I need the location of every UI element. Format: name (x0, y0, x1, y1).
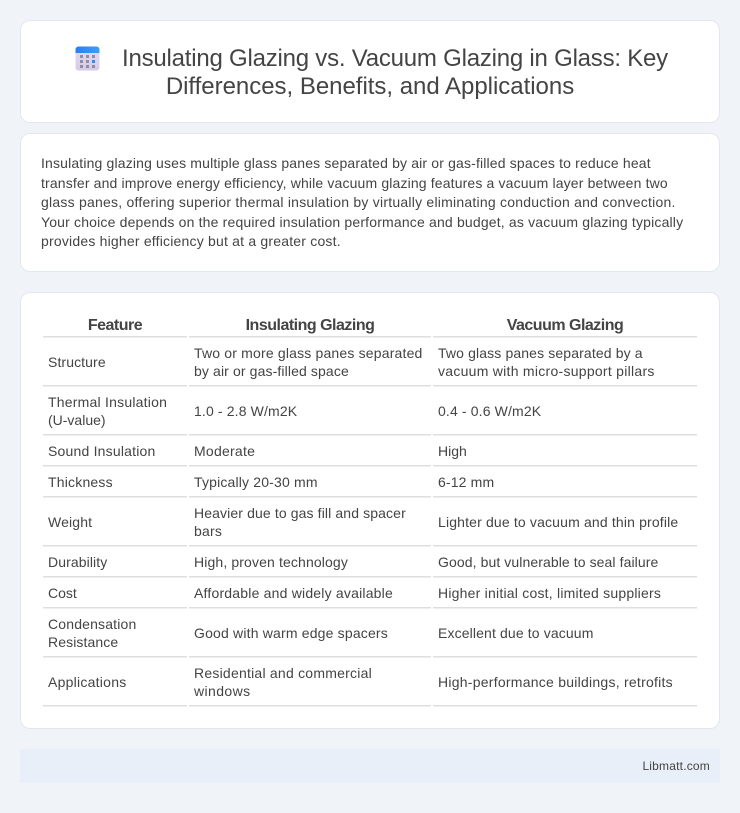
row: structure (48, 345, 655, 379)
table header: Vacuum Glazing (507, 317, 623, 334)
row: applications (48, 665, 673, 699)
title: Differences, Benefits, and Applications (166, 73, 574, 100)
row: thermal insulation: (U-value) (48, 412, 106, 428)
panel: comparison table (20, 292, 720, 729)
row: durability: High, proven technology (194, 554, 348, 570)
row: weight: Lighter due to vacuum and thin profile (438, 514, 678, 530)
row: applications: windows (194, 683, 250, 699)
row: thickness (48, 474, 494, 490)
row: structure: Two glass panes separated by a (438, 345, 643, 361)
row: condensation resistance (48, 616, 594, 650)
row: thermal insulation (48, 394, 541, 428)
row: condensation resistance: Condensation (48, 616, 136, 632)
row: sound insulation: Moderate (194, 443, 255, 459)
row: thermal insulation: 1.0 - 2.8 W/m2K (194, 403, 297, 419)
row: cost: Higher initial cost, limited suppliers (438, 585, 661, 601)
text block: introduction (41, 155, 684, 249)
row: condensation resistance: Excellent due to vacuum (438, 625, 594, 641)
row: weight: Weight (48, 514, 92, 530)
row: durability: Durability (48, 554, 107, 570)
row: durability: Good, but vulnerable to seal failure (438, 554, 658, 570)
row: applications: Applications (48, 674, 126, 690)
table header (88, 317, 623, 334)
row: thickness: 6-12 mm (438, 474, 494, 490)
row: structure: Structure (48, 354, 106, 370)
row: structure: vacuum with micro-support pillars (438, 363, 655, 379)
row: sound insulation: Sound Insulation (48, 443, 156, 459)
row: condensation resistance: Good with warm edge spacers (194, 625, 388, 641)
footer: Libmatt.com (642, 759, 710, 773)
text block: introduction: Your choice depends on the required insulation performance and budget, as vacuum glazing typically (41, 214, 683, 230)
panel: title card (20, 20, 720, 123)
row: structure: by air or gas-filled space (194, 363, 349, 379)
row: weight (48, 505, 678, 539)
row: condensation resistance: Resistance (48, 634, 118, 650)
footer (20, 749, 720, 783)
table header: Insulating Glazing (246, 317, 374, 334)
row: thickness: Typically 20-30 mm (194, 474, 318, 490)
row: cost: Affordable and widely available (194, 585, 393, 601)
row: applications: High-performance buildings, retrofits (438, 674, 673, 690)
text block: introduction: provides higher efficiency but at a greater cost. (41, 233, 341, 249)
row: sound insulation: High (438, 443, 467, 459)
title (122, 45, 668, 100)
table header: Feature (88, 317, 142, 334)
row: weight: Heavier due to gas fill and spacer (194, 505, 406, 521)
panel: introduction (20, 133, 720, 272)
row: durability (48, 554, 658, 570)
row: applications: Residential and commercial (194, 665, 372, 681)
row: cost (48, 585, 661, 601)
text block: introduction: transfer and improve energy efficiency, while vacuum glazing features a vacuum layer between two (41, 175, 668, 191)
row: thickness: Thickness (48, 474, 113, 490)
row: sound insulation (48, 443, 467, 459)
row: thermal insulation: Thermal Insulation (48, 394, 167, 410)
row: thermal insulation: 0.4 - 0.6 W/m2K (438, 403, 541, 419)
row: structure: Two or more glass panes separated (194, 345, 423, 361)
row: cost: Cost (48, 585, 77, 601)
title: Insulating Glazing vs. Vacuum Glazing in Glass: Key (122, 45, 668, 72)
row: weight: bars (194, 523, 222, 539)
text block: introduction: Insulating glazing uses multiple glass panes separated by air or gas-filled spaces to reduce heat (41, 155, 651, 171)
text block: introduction: glass panes, offering superior thermal insulation by virtually eliminating conduction and convection. (41, 194, 676, 210)
icon: calendar (76, 46, 100, 70)
